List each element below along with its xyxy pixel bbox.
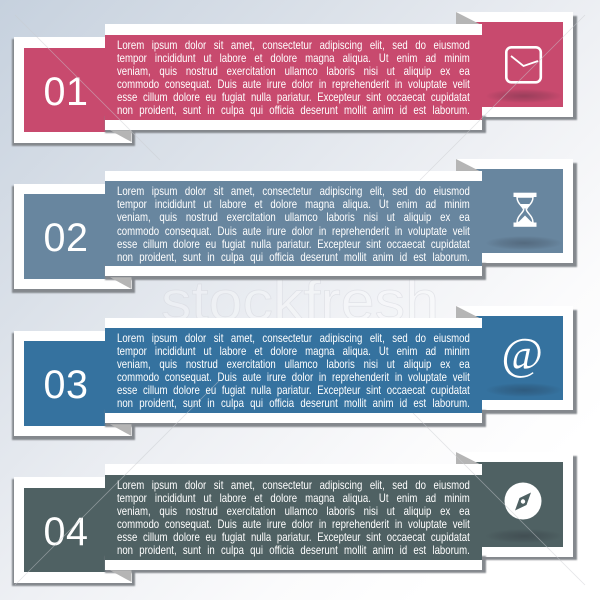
body text: tempor incididunt ut labore et dolore magna aliqua. Ut enim ad minim: [117, 197, 470, 211]
panel: row 04: [11, 452, 578, 587]
watermark: stockfresh: [161, 269, 439, 332]
body text: [117, 184, 470, 264]
body text: non proident, sunt in culpa qui officia deserunt mollit anim id est laborum.: [117, 250, 470, 264]
fold top right: [456, 452, 480, 464]
body text: esse cillum dolore eu fugiat nulla pariatur. Excepteur sint occaecat cupidatat: [117, 90, 470, 104]
fold top right: [456, 159, 480, 171]
icon: compass: [504, 482, 542, 520]
body text: esse cillum dolore eu fugiat nulla pariatur. Excepteur sint occaecat cupidatat: [117, 237, 470, 251]
fold bottom left: [110, 277, 132, 289]
text band 02: [105, 181, 482, 266]
right icon panel 04: [474, 462, 563, 547]
icon: hourglass: [514, 192, 536, 227]
fold bottom left: [110, 424, 132, 436]
right icon panel 03: [474, 316, 563, 400]
text band 04: [105, 475, 482, 560]
body text: [117, 331, 470, 410]
icon: at sign: @: [501, 330, 543, 378]
panel: row 02: [11, 159, 578, 294]
body text: veniam, quis nostrud exercitation ullamco laboris nisi ut aliquip ex ea: [117, 357, 470, 371]
body text: non proident, sunt in culpa qui officia deserunt mollit anim id est laborum.: [117, 543, 470, 557]
body text: esse cillum dolore eu fugiat nulla pariatur. Excepteur sint occaecat cupidatat: [117, 530, 470, 544]
body text: Lorem ipsum dolor sit amet, consectetur adipiscing elit, sed do eiusmod: [117, 38, 470, 52]
body text: [117, 478, 470, 557]
body text: veniam, quis nostrud exercitation ullamco laboris nisi ut aliquip ex ea: [117, 64, 470, 78]
number 04: 04: [44, 510, 88, 554]
fold top right: [456, 12, 480, 24]
icon: envelope: [505, 46, 542, 84]
number 03: 03: [44, 363, 88, 407]
body text: commodo consequat. Duis aute irure dolor in reprehenderit in voluptate velit: [117, 224, 470, 238]
body text: non proident, sunt in culpa qui officia deserunt mollit anim id est laborum.: [117, 103, 470, 117]
right icon panel 01: [474, 22, 563, 106]
body text: non proident, sunt in culpa qui officia deserunt mollit anim id est laborum.: [117, 396, 470, 410]
body text: commodo consequat. Duis aute irure dolor in reprehenderit in voluptate velit: [117, 370, 470, 384]
text band 03: [105, 328, 482, 413]
body text: Lorem ipsum dolor sit amet, consectetur adipiscing elit, sed do eiusmod: [117, 478, 470, 492]
body text: [117, 38, 470, 117]
body text: Lorem ipsum dolor sit amet, consectetur adipiscing elit, sed do eiusmod: [117, 331, 470, 345]
body text: veniam, quis nostrud exercitation ullamco laboris nisi ut aliquip ex ea: [117, 504, 470, 518]
body text: tempor incididunt ut labore et dolore magna aliqua. Ut enim ad minim: [117, 344, 470, 358]
fold bottom left: [110, 570, 132, 582]
panel: row 03: [11, 306, 578, 441]
body text: esse cillum dolore eu fugiat nulla pariatur. Excepteur sint occaecat cupidatat: [117, 383, 470, 397]
number 01: 01: [44, 70, 88, 114]
body text: commodo consequat. Duis aute irure dolor in reprehenderit in voluptate velit: [117, 77, 470, 91]
right icon panel 02: [474, 169, 563, 253]
fold bottom left: [110, 130, 132, 142]
body text: tempor incididunt ut labore et dolore magna aliqua. Ut enim ad minim: [117, 491, 470, 505]
text band 01: [105, 34, 482, 120]
number 02: 02: [44, 216, 88, 260]
body text: veniam, quis nostrud exercitation ullamco laboris nisi ut aliquip ex ea: [117, 210, 470, 224]
body text: Lorem ipsum dolor sit amet, consectetur adipiscing elit, sed do eiusmod: [117, 184, 470, 198]
body text: commodo consequat. Duis aute irure dolor in reprehenderit in voluptate velit: [117, 517, 470, 531]
fold top right: [456, 306, 480, 318]
body text: tempor incididunt ut labore et dolore magna aliqua. Ut enim ad minim: [117, 51, 470, 65]
panel: row 01: [11, 12, 578, 147]
